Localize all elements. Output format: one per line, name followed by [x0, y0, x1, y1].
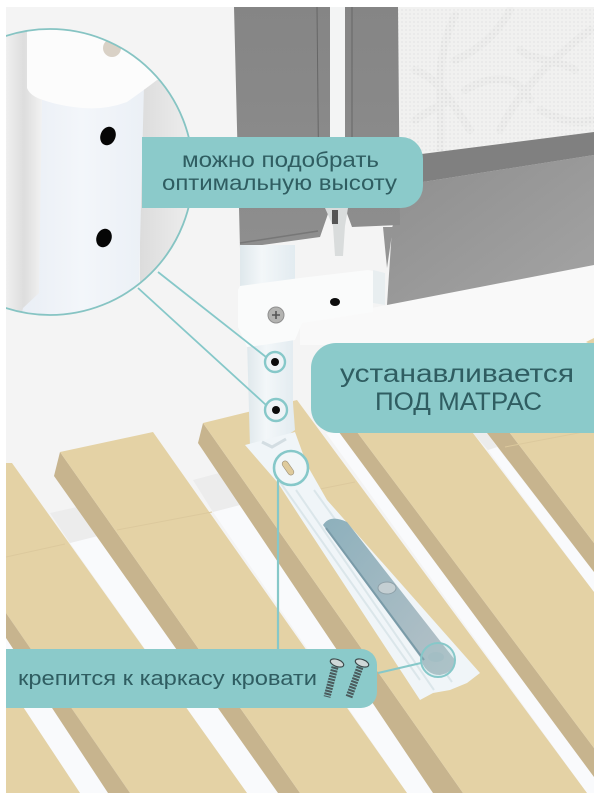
mesh panel — [396, 7, 594, 159]
connector line: slot to fastening label — [277, 480, 279, 650]
leader lines: lens to post holes — [138, 272, 266, 405]
rings on post holes — [265, 352, 287, 421]
label: under mattress — [311, 343, 594, 433]
slats — [6, 338, 594, 793]
label: attaches to bed frame — [6, 649, 377, 708]
metal plate — [323, 519, 455, 675]
label: attaches to bed frame: крепится к каркасу кровати — [18, 668, 317, 690]
zoom lens: post close-up — [0, 28, 196, 320]
zipper pull — [325, 208, 348, 256]
shaded floor patches — [72, 505, 238, 542]
label: under mattress: устанавливается — [340, 360, 574, 388]
rail on slat — [245, 432, 480, 700]
lower gray panel — [383, 132, 594, 305]
ring: rail slot — [274, 451, 308, 485]
bracket connector — [238, 270, 385, 347]
vertical post upper — [240, 245, 295, 286]
bracket hole — [330, 298, 340, 306]
label: adjustable height: можно подобрать — [182, 149, 379, 172]
upper gray fabric with zipper — [234, 7, 400, 256]
white gaps between slats — [6, 433, 594, 793]
floor under fabric — [300, 265, 594, 345]
icon: screws — [327, 657, 370, 697]
adjustment holes — [96, 126, 116, 248]
connector line: plate to fastening label — [378, 663, 421, 673]
label: adjustable height: оптимальную высоту — [162, 172, 398, 195]
label: adjustable height — [142, 137, 423, 208]
lower post — [247, 335, 295, 447]
ring: plate fastener — [421, 643, 455, 677]
icon: screw head — [268, 307, 284, 323]
label: under mattress: ПОД МАТРАС — [375, 388, 542, 416]
